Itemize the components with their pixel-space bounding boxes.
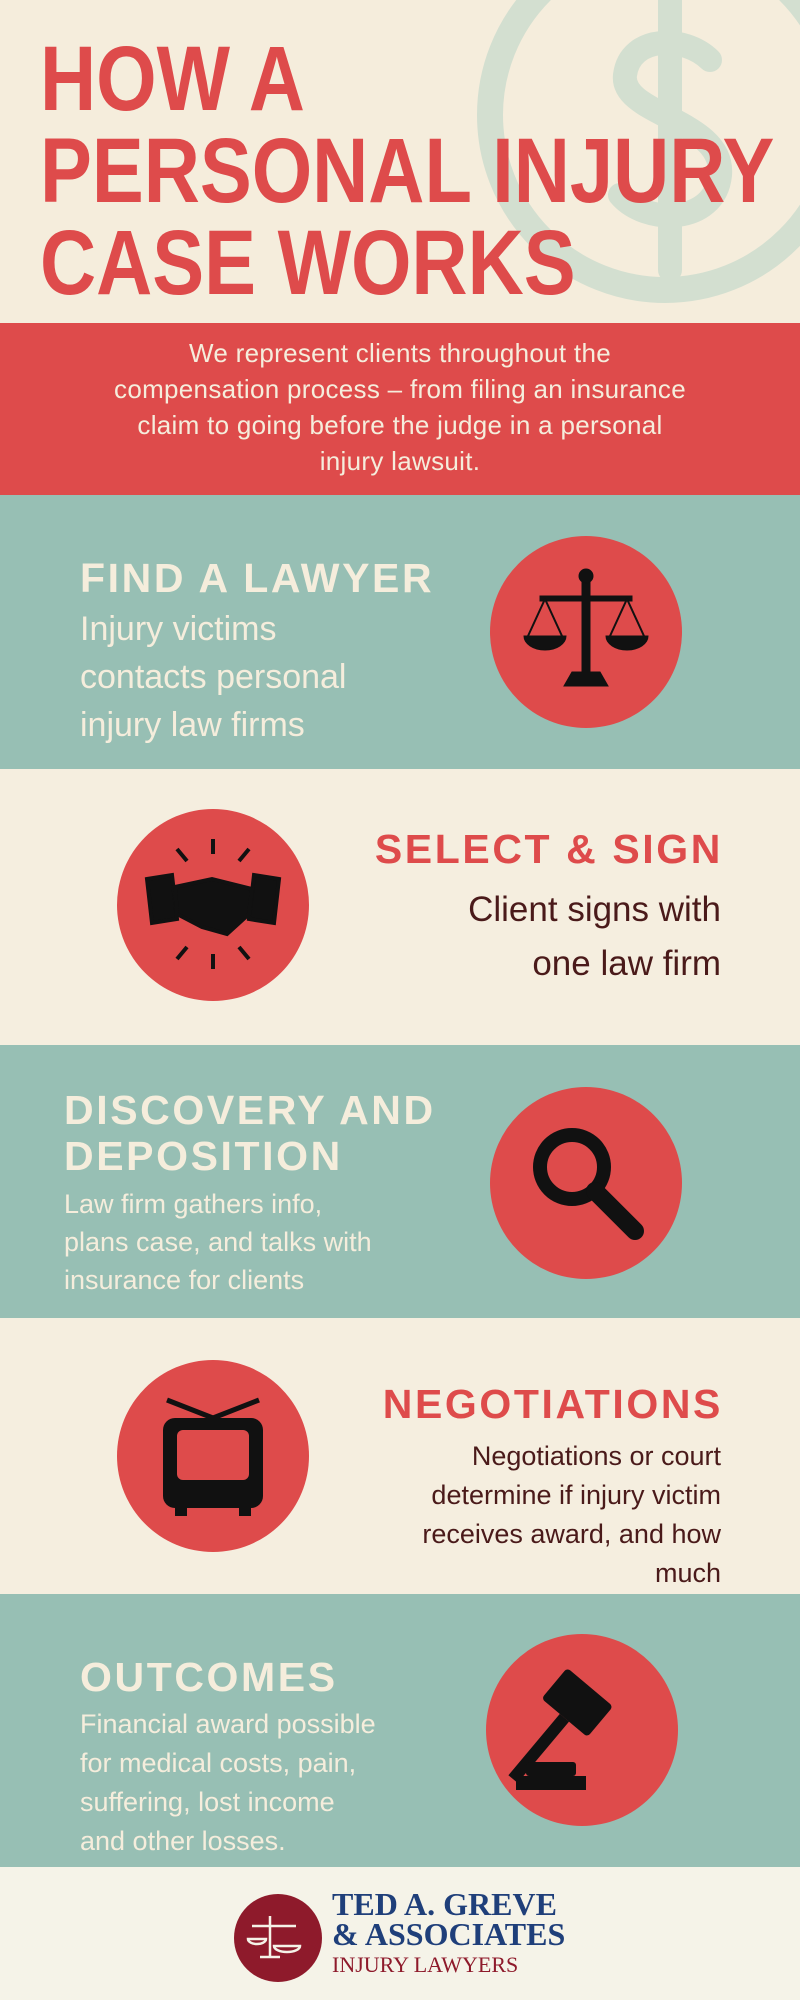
body: receives award, and how: [422, 1519, 721, 1549]
logo text: TED A. GREVE: [332, 1886, 557, 1922]
icon: magnifier: [490, 1087, 682, 1279]
body: contacts personal: [80, 658, 346, 696]
body: [80, 610, 346, 744]
panel: find a lawyer: [0, 495, 800, 769]
icon: gavel: [486, 1634, 678, 1826]
body: [80, 1709, 376, 1856]
body: Negotiations or court: [472, 1441, 721, 1471]
body: for medical costs, pain,: [80, 1748, 356, 1778]
intro text: claim to going before the judge in a personal: [137, 410, 663, 440]
body: [468, 890, 721, 983]
footer logo: INJURY LAWYERS: [332, 1952, 518, 1977]
icon: tv: [117, 1360, 309, 1552]
body: suffering, lost income: [80, 1787, 335, 1817]
footer logo: [0, 1867, 800, 2000]
panel: discovery: [0, 1045, 800, 1318]
body: Client signs with: [468, 890, 721, 929]
logo text: & ASSOCIATES: [332, 1916, 565, 1952]
heading: SELECT & SIGN: [375, 826, 723, 872]
title: HOW A: [40, 28, 305, 130]
intro text: injury lawsuit.: [320, 446, 480, 476]
heading: NEGOTIATIONS: [383, 1381, 723, 1427]
intro text: [114, 338, 686, 476]
body: plans case, and talks with: [64, 1227, 372, 1257]
body: and other losses.: [80, 1826, 286, 1856]
header: [0, 0, 800, 323]
heading: DEPOSITION: [64, 1133, 343, 1179]
body: insurance for clients: [64, 1265, 304, 1295]
body: [422, 1441, 721, 1588]
body: [64, 1189, 372, 1295]
icon: logo circle: [234, 1894, 322, 1982]
title: PERSONAL INJURY: [40, 120, 774, 222]
icon: scales: [490, 536, 682, 728]
body: one law firm: [532, 944, 721, 983]
body: determine if injury victim: [431, 1480, 721, 1510]
panel: select & sign: [0, 769, 800, 1045]
title: CASE WORKS: [40, 212, 576, 314]
body: Injury victims: [80, 610, 276, 648]
body: Law firm gathers info,: [64, 1189, 322, 1219]
title: [40, 28, 774, 314]
intro text: compensation process – from filing an insurance: [114, 374, 686, 404]
icon: dollar coin background: [477, 0, 800, 303]
heading: [64, 1087, 436, 1179]
panel: negotiations: [0, 1318, 800, 1594]
heading: DISCOVERY AND: [64, 1087, 436, 1133]
panel: outcomes: [0, 1594, 800, 1867]
body: much: [655, 1558, 721, 1588]
heading: FIND A LAWYER: [80, 555, 434, 601]
icon: handshake: [117, 809, 309, 1001]
heading: OUTCOMES: [80, 1654, 338, 1700]
logo text: [332, 1886, 565, 1952]
body: injury law firms: [80, 706, 305, 744]
intro text: We represent clients throughout the: [189, 338, 611, 368]
body: Financial award possible: [80, 1709, 376, 1739]
intro band: [0, 323, 800, 495]
